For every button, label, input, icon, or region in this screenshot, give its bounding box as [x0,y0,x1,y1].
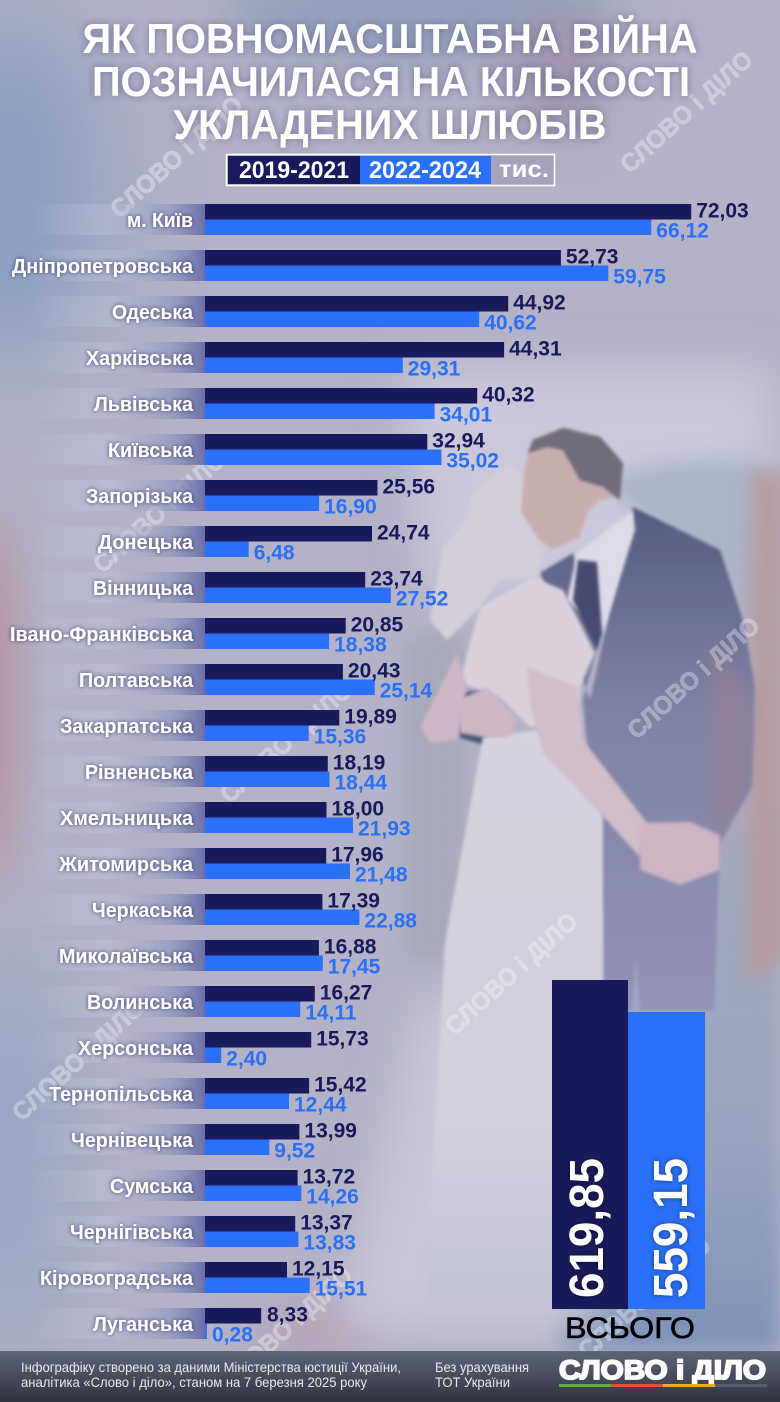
row: Закарпатська: 19,89 [344,706,397,728]
photo: shirt and tie [567,510,635,633]
row: Рівненська: 18,44 [334,772,387,794]
row: Чернівецька: 9,52 [274,1140,315,1162]
row: Луганська [30,1304,308,1346]
row: Сумська: 13,72 [303,1166,355,1188]
totals bars: 619,85 [561,1158,614,1298]
row: Вінницька: 27,52 [396,588,448,610]
row: Черкаська: Черкаська [92,900,194,922]
row: Дніпропетровська: 52,73 [566,246,618,268]
row: Закарпатська: Закарпатська [60,716,194,738]
photo: wedding couple [340,370,780,1351]
row: Київська: 35,02 [446,450,499,472]
row: Житомирська [30,844,408,886]
row: Сумська [30,1166,359,1208]
watermarks: СЛОВО і ДІЛО [573,1231,716,1365]
photo: dress [425,725,606,1300]
footer: Інфографіку створено за даними Міністерства юстиції України, [21,1359,401,1375]
row: Закарпатська [30,706,397,748]
row: Одеська: 44,92 [513,292,566,314]
title: ЯК ПОВНОМАСШТАБНА ВІЙНА [82,14,698,62]
row: Донецька: 6,48 [254,542,295,564]
row: Івано-Франківська: 18,38 [334,634,387,656]
row: Херсонська: 15,73 [316,1028,369,1050]
row: Рівненська: 18,19 [333,752,385,774]
photo: sky, mountains and meadow [340,370,780,1351]
row: Вінницька [30,568,448,610]
row: Луганська: 8,33 [267,1304,308,1326]
title [82,14,698,148]
row: Житомирська: 21,48 [355,864,408,886]
photo: groom suit [540,507,755,1010]
row: м. Київ: м. Київ [127,210,193,232]
row: Сумська: Сумська [110,1176,194,1198]
row: Полтавська: 25,14 [380,680,433,702]
footer [0,1351,780,1402]
row: Львівська: 40,32 [482,384,535,406]
watermarks: СЛОВО і ДІЛО [440,907,583,1041]
row: Львівська: 34,01 [440,404,492,426]
row: Миколаївська: Миколаївська [59,946,194,968]
row: Хмельницька [30,798,411,840]
row: Чернігівська: 13,37 [300,1212,353,1234]
row: Запорізька: 16,90 [324,496,377,518]
row: Луганська: Луганська [93,1314,194,1336]
row: Луганська: 0,28 [212,1324,253,1346]
row: Рівненська: Рівненська [85,762,194,784]
row: Чернівецька [30,1120,357,1162]
watermarks: СЛОВО і ДІЛО [215,1261,358,1395]
row: Кіровоградська [30,1258,368,1300]
row: Волинська: Волинська [87,992,194,1014]
footer: ТОТ України [435,1374,510,1390]
row: м. Київ: 66,12 [656,220,709,242]
totals bars: ВСЬОГО [565,1312,695,1345]
row: Івано-Франківська: Івано-Франківська [10,624,194,646]
row: Тернопільська [30,1074,367,1116]
row: Вінницька: Вінницька [93,578,194,600]
row: Одеська [30,292,566,334]
row: Запорізька: 25,56 [382,476,435,498]
row: Сумська: 14,26 [306,1186,359,1208]
row: Рівненська [30,752,387,794]
row: Житомирська: 17,96 [331,844,384,866]
photo: bride arms and hands [527,667,647,857]
row: Харківська [30,338,562,380]
legend: тис. [499,156,549,182]
row: Полтавська [30,660,433,702]
watermarks: СЛОВО і ДІЛО [622,611,765,745]
title: УКЛАДЕНИХ ШЛЮБІВ [174,101,606,148]
row: Черкаська: 17,39 [327,890,380,912]
row: Львівська: Львівська [94,394,194,416]
row: Хмельницька: 21,93 [358,818,411,840]
row: Херсонська: Херсонська [78,1038,194,1060]
row: Волинська: 16,27 [320,982,372,1004]
row: Харківська: 29,31 [408,358,461,380]
row: Львівська [30,384,535,426]
footer: Без урахування [435,1359,529,1375]
row: Черкаська: 22,88 [364,910,417,932]
row: Івано-Франківська [10,614,404,656]
row: Херсонська [30,1028,369,1070]
row: Хмельницька: Хмельницька [60,808,194,830]
row: Волинська [30,982,372,1024]
watermarks: СЛОВО і ДІЛО [105,90,248,224]
row: Полтавська: Полтавська [79,670,194,692]
photo: bride hair [430,463,543,640]
row: Запорізька: Запорізька [86,486,194,508]
row: Одеська: 40,62 [484,312,537,334]
row: Харківська: Харківська [86,348,194,370]
totals bars [552,980,705,1345]
row: Івано-Франківська: 20,85 [351,614,404,636]
watermarks: СЛОВО і ДІЛО [88,445,231,579]
watermarks: СЛОВО і ДІЛО [7,993,150,1127]
row: Миколаївська [30,936,381,978]
bar chart: regions [10,200,749,1346]
row: Тернопільська: Тернопільська [49,1084,194,1106]
legend: 2019-2021 [239,157,349,184]
row: Тернопільська: 15,42 [314,1074,367,1096]
watermarks: СЛОВО і ДІЛО [215,675,358,809]
row: Миколаївська: 16,88 [324,936,377,958]
watermarks: СЛОВО і ДІЛО [615,45,758,179]
row: м. Київ: 72,03 [696,200,749,222]
row: м. Київ [30,200,749,242]
totals bars: 559,15 [645,1158,698,1298]
row: Київська: 32,94 [432,430,485,452]
row: Полтавська: 20,43 [348,660,400,682]
row: Дніпропетровська [12,246,666,288]
row: Чернігівська: Чернігівська [70,1222,194,1244]
row: Кіровоградська: 15,51 [315,1278,368,1300]
row: Чернівецька: Чернівецька [71,1130,194,1152]
title: ПОЗНАЧИЛАСЯ НА КІЛЬКОСТІ [92,58,690,105]
row: Житомирська: Житомирська [58,854,194,876]
row: Чернігівська [30,1212,356,1254]
row: Дніпропетровська: 59,75 [613,266,666,288]
legend: 2022-2024 [369,157,482,184]
row: Черкаська [30,890,417,932]
row: Тернопільська: 12,44 [294,1094,347,1116]
row: Кіровоградська: 12,15 [292,1258,345,1280]
footer: аналітика «Слово і діло», станом на 7 березня 2025 року [21,1374,367,1390]
row: Чернівецька: 13,99 [304,1120,357,1142]
row: Волинська: 14,11 [305,1002,357,1024]
row: Хмельницька: 18,00 [332,798,384,820]
row: Закарпатська: 15,36 [314,726,366,748]
photo: bride bodice [460,577,595,727]
row: Херсонська: 2,40 [226,1048,267,1070]
row: Вінницька: 23,74 [370,568,423,590]
row: Чернігівська: 13,83 [303,1232,356,1254]
row: Донецька [30,522,430,564]
legend [226,154,554,186]
row: Київська: Київська [108,440,194,462]
row: Запорізька [30,476,435,518]
row: Донецька: Донецька [98,532,194,554]
logo: Слово і Діло: СЛОВО і ДІЛО [559,1355,766,1385]
row: Кіровоградська: Кіровоградська [40,1268,194,1290]
row: Одеська: Одеська [112,302,194,324]
row: Київська [30,430,499,472]
photo: groom head [520,428,623,550]
row: Харківська: 44,31 [509,338,562,360]
row: Миколаївська: 17,45 [328,956,381,978]
row: Донецька: 24,74 [377,522,430,544]
row: Дніпропетровська: Дніпропетровська [12,256,194,278]
